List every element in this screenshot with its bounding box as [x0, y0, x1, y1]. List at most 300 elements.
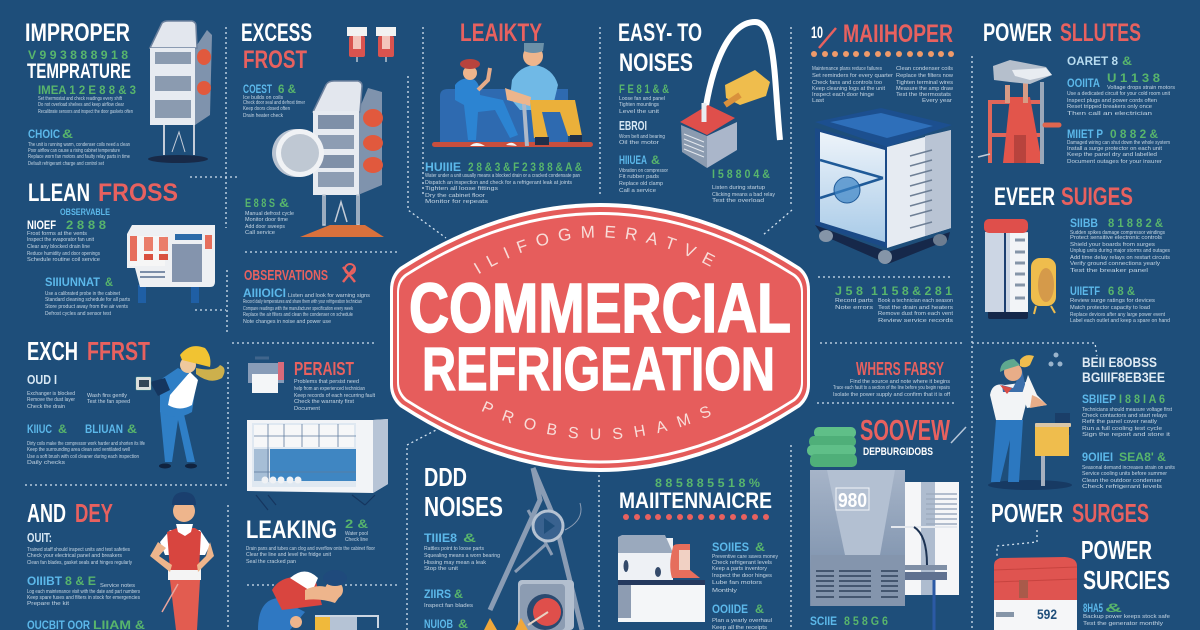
heading: SLLUTES — [1060, 19, 1141, 47]
dot row — [623, 514, 769, 520]
text block — [835, 298, 954, 324]
subheadings: & — [58, 422, 67, 436]
text block: Squealing means a worn bearing — [424, 553, 500, 559]
text block: Technicians should measure voltage first — [1082, 407, 1172, 413]
text block: Defrost cycles and sensor test — [45, 311, 111, 317]
text block right: Test the thermostats — [896, 92, 951, 98]
text block — [712, 185, 775, 204]
text block: Clear the line and level the fridge unit — [246, 552, 331, 558]
text block: Shield your boards from surges — [1070, 242, 1155, 248]
subheading: & — [454, 587, 463, 601]
subheading — [1067, 71, 1160, 90]
subheading row: 2 8 & 3 & F 2 3 8 8 & A & — [468, 160, 582, 174]
text block: Service cooling units before summer — [1082, 471, 1167, 477]
text block: Run a full cooling test cycle — [1082, 426, 1162, 432]
text block: Replace old clamp — [619, 181, 663, 187]
text block: Lube fan motors — [712, 580, 762, 586]
text block right: Replace the filters now — [896, 73, 953, 79]
subheadings — [27, 422, 137, 436]
subheading: COEST — [243, 82, 272, 96]
text block: Preventive care saves money — [712, 554, 778, 560]
badge kicker: ILIFOGMERATVE — [474, 226, 716, 274]
text block: Find the source and note where it begins — [850, 379, 950, 385]
heading with icon: OBSERVATIONS — [244, 267, 328, 284]
green label: J 5 8 — [835, 284, 863, 298]
panel: maintenance bottom — [618, 476, 778, 630]
text block: Frost forms at the vents — [27, 231, 87, 237]
text block: Use a soft brush with coil cleaner during each inspection — [27, 454, 139, 460]
heading — [27, 498, 113, 528]
panel: maintenance top — [811, 20, 954, 324]
subheading — [810, 614, 888, 628]
heading: EASY- TO — [618, 19, 702, 47]
text block — [38, 96, 133, 115]
title line 2: REFRIGEATION — [422, 335, 775, 403]
text block: Do not overload shelves and keep airflow clear — [38, 102, 124, 108]
text block — [425, 173, 580, 205]
text block: Inspect the evaporator fan unit — [27, 237, 94, 243]
subheading: OIIIBT — [27, 574, 63, 588]
text block: Clean the outdoor condenser — [1082, 478, 1162, 484]
panel: exch first — [27, 336, 225, 468]
subheading: I 8 8 I A 6 — [1119, 392, 1165, 406]
dot row — [811, 51, 954, 57]
text block right: Tighten terminal wires — [896, 80, 953, 86]
text block left: Maintenance plans reduce failures — [812, 66, 882, 72]
text block — [619, 134, 665, 146]
heading: POWER — [983, 19, 1052, 47]
panel: leaking — [246, 516, 378, 630]
heading: NOISES — [424, 491, 503, 522]
side note: Check line — [345, 537, 368, 543]
text block: Label each outlet and keep a spare on hand — [1070, 318, 1170, 324]
heading: SURGES — [1072, 498, 1149, 528]
icon: red generator: 592 — [1037, 606, 1057, 622]
subheading: SCIIE — [810, 614, 837, 628]
icon: frosted fridge — [272, 81, 384, 237]
text block: Test the generator monthly — [1083, 621, 1163, 627]
icon: red canisters — [347, 27, 396, 62]
text block: Check refrigerant levels — [712, 560, 772, 566]
text block: Level the unit — [619, 109, 660, 115]
subheading: TIIIE8 — [424, 531, 457, 545]
text block — [1082, 465, 1175, 490]
text block: Trained staff should inspect units and test safeties — [27, 547, 130, 553]
text block — [246, 546, 375, 565]
illustration: white machine — [618, 535, 705, 622]
text block: Dry the cabinet floor — [425, 193, 485, 199]
text block: Use a dedicated circuit for your cold room unit — [1067, 91, 1170, 97]
text block: Monitor for repeats — [425, 199, 488, 205]
subheading: & — [651, 153, 660, 167]
illustration: condenser machine: 980 — [838, 490, 867, 512]
text block: Listen and look for warning signs — [288, 293, 370, 299]
text block: Default refrigerant charge and control set — [28, 161, 104, 167]
text block: Check refrigerant levels — [1082, 484, 1162, 490]
text block — [424, 546, 500, 572]
text block: Oil the motor — [619, 140, 659, 146]
text block: Install a surge protector on each unit — [1067, 146, 1162, 152]
illustration: condenser machine — [810, 470, 959, 630]
text block: Log each maintenance visit with the date and part numbers — [27, 589, 140, 595]
subheading — [1070, 216, 1163, 230]
text block: Compare readings with the manufacturer specification every week — [243, 306, 353, 312]
text block — [1067, 85, 1175, 117]
text block: Listen during startup — [712, 185, 765, 191]
heading: 10 — [811, 23, 823, 42]
text block: Dispatch an inspection and check for a refrigerant leak at joints — [425, 180, 572, 186]
text block — [27, 589, 140, 607]
subheading: HIIUEA — [619, 153, 647, 167]
text block: Match protector capacity to load — [1070, 305, 1150, 311]
subheading — [27, 218, 106, 232]
heading: SURCIES — [1083, 565, 1170, 595]
text block: Set thermostat and check readings every shift — [38, 96, 122, 102]
text block: Inspect the door hinges — [712, 573, 772, 579]
subheading: & — [1105, 601, 1123, 615]
heading: FFRST — [87, 336, 150, 366]
text block: Keep a parts inventory — [712, 566, 767, 572]
heading: LEAKING — [246, 516, 337, 544]
heading — [28, 179, 178, 207]
subheading: SIIIUNNAT — [45, 275, 101, 289]
heading: DEY — [75, 498, 113, 528]
text block: Loose fan and panel — [619, 96, 665, 102]
text block: Monitor door time — [245, 217, 288, 223]
text block: Monthly — [712, 588, 737, 594]
text block: Water under a unit usually means a blocked drain or a cracked condensate pan — [425, 173, 580, 179]
subheading: 6 8 & — [1108, 284, 1135, 298]
panel: persist — [247, 358, 388, 510]
text block right: Measure the amp draw — [896, 86, 953, 92]
text block: Call a service — [619, 188, 656, 194]
subheading: UIIETF — [1070, 284, 1100, 298]
text block right: Clean condenser coils — [896, 66, 953, 72]
text block: Test the breaker panel — [1070, 268, 1148, 274]
subheadings: BLIUAN — [85, 422, 123, 436]
subheading: NIOEF — [27, 218, 56, 232]
subheading: OUIT: — [27, 530, 52, 545]
white heading lines: BEII E8OBSS — [1082, 354, 1157, 370]
subheading: SIIBB — [1070, 216, 1098, 230]
text block: Check your electrical panel and breakers — [27, 553, 122, 559]
text block — [243, 293, 370, 325]
illustration: hose and compressor box — [680, 22, 780, 168]
text block: Keep spare fuses and filters in stock for emergencies — [27, 595, 140, 601]
text block — [245, 211, 294, 236]
text block: Document — [294, 406, 320, 412]
subheading: ZIIRS — [424, 587, 451, 601]
text block — [27, 231, 100, 263]
icon: technician in red vest — [150, 492, 214, 630]
text block: Record parts — [835, 298, 873, 304]
panel: power surges — [991, 498, 1170, 630]
side note — [345, 531, 368, 543]
text block: The unit is running warm, condenser coils need a clean — [28, 142, 130, 148]
text block: Manual defrost cycle — [245, 211, 294, 217]
icon: display fridge — [148, 21, 212, 163]
green label: 2 & — [345, 517, 368, 531]
heading — [994, 183, 1133, 211]
text block: Use a calibrated probe in the cabinet — [45, 291, 120, 297]
text block: Test the drain and heaters — [878, 305, 953, 311]
text block: Remove dust from each vent — [878, 311, 954, 317]
text block: Sign the report and store it — [1082, 432, 1171, 438]
text block: Vibration on compressor — [619, 168, 668, 174]
subheading: choice: & — [62, 127, 73, 141]
subheading: choice: CHOIC — [28, 127, 60, 141]
central badge — [390, 203, 810, 472]
heading: WHERS FABSY — [856, 359, 944, 379]
text block left: Check fans and controls too — [812, 80, 882, 86]
text block — [27, 547, 132, 566]
text block left: Inspect each door hinge — [812, 92, 874, 98]
text block: Dirty coils make the compressor work harder and shorten its life — [27, 441, 145, 447]
blue label: OBSERVABLE — [60, 207, 110, 217]
text block — [1070, 298, 1170, 324]
subheading: OARET 8 — [1067, 54, 1118, 68]
text block — [45, 291, 130, 317]
text block right: Every year — [922, 98, 952, 104]
heading — [811, 20, 953, 48]
text block: Keep the surrounding area clean and ventilated well — [27, 447, 130, 453]
subheading: SBIIEP — [1082, 392, 1116, 406]
subheading: MIIET P — [1067, 127, 1103, 141]
text block: Add door sweeps — [245, 224, 285, 230]
text block: Seal the cracked pan — [246, 559, 296, 565]
text block: Protect sensitive electronic controls — [1070, 235, 1162, 241]
text block: Poor airflow can cause a rising cabinet temperature — [28, 148, 120, 154]
icon: red generator — [994, 557, 1077, 630]
text block left: Last — [812, 98, 825, 104]
subheadings: & — [127, 422, 137, 436]
icon: display case — [247, 419, 388, 510]
icon: small cabinet — [248, 358, 284, 393]
icon: green stack — [807, 427, 857, 467]
subheading: & — [1122, 54, 1132, 68]
heading — [27, 336, 150, 366]
green label: & — [279, 196, 289, 210]
text block: Wash fins gently — [87, 393, 127, 399]
green label: F E 8 1 & & — [619, 82, 669, 96]
panel: soovew unit — [807, 415, 966, 630]
text block: Check door seal and defrost timer — [243, 100, 305, 106]
text block: Document outages for your insurer — [1067, 159, 1162, 165]
text block: Plan a yearly overhaul — [712, 618, 772, 624]
subheadings: KIIUC — [27, 422, 52, 436]
text block: Unplug units during major storms and outages — [1070, 248, 1170, 254]
subheading: AIIIOICI — [243, 286, 286, 300]
text block: Check the warranty first — [294, 399, 354, 405]
arrow accent — [951, 427, 966, 443]
panel: where's fabsy — [833, 359, 950, 398]
subheading: OOIITA — [1067, 76, 1100, 90]
illustration: gauge hoses and compressor — [484, 468, 582, 630]
heading: PERAIST — [294, 359, 354, 379]
subheading: 0 8 8 2 & — [1110, 127, 1158, 141]
subheading — [27, 618, 145, 630]
panel: odd noises — [424, 462, 582, 630]
text block — [833, 379, 950, 398]
text block: Clicking means a bad relay — [712, 192, 775, 198]
text block left: Keep cleaning logs at the unit — [812, 86, 885, 92]
text block: Keep records of each recurring fault — [294, 393, 375, 399]
heading: FROSS — [98, 179, 178, 207]
text block: Stop the unit — [424, 566, 459, 572]
subheading: & — [105, 275, 113, 289]
text block: Store product away from the air vents — [45, 304, 128, 310]
text block: Tighten all loose fittings — [425, 186, 498, 192]
icon: woman in hard hat — [136, 346, 225, 468]
text block left — [812, 66, 893, 104]
text block: Trace each fault to a section of the line before you begin repairs — [833, 385, 950, 391]
icon: worker bending — [258, 570, 378, 630]
text block: Clear any blocked drain line — [27, 244, 90, 250]
icon: blue-top unit — [815, 108, 952, 264]
text block: Prepare the kit — [27, 601, 70, 607]
heading: NOISES — [619, 49, 693, 77]
text block — [1067, 140, 1170, 165]
green label — [835, 284, 952, 298]
heading: POWER — [1081, 535, 1152, 565]
heading: POWER — [991, 498, 1063, 528]
text block: help from an experienced technician — [294, 386, 365, 392]
subheading: 8 1 8 8 2 & — [1108, 216, 1163, 230]
text block — [619, 96, 665, 115]
green label: I 5 8 8 0 4 & — [712, 167, 770, 181]
text block: Replace worn fan motors and faulty relay parts in time — [28, 154, 130, 160]
text block — [243, 95, 305, 119]
text block: Remove the dust layer — [27, 397, 75, 403]
text block: Keep the panel dry and labelled — [1067, 152, 1157, 158]
green subheading: V 9 9 3 8 8 8 9 1 8 — [28, 48, 128, 62]
panel: ever surges — [984, 183, 1170, 324]
heading: EVEER — [994, 183, 1055, 211]
green label: E 8 8 S — [245, 196, 275, 210]
illustration: two people on a bench — [432, 43, 593, 147]
text block right — [896, 66, 953, 104]
illustration: technician at desk — [988, 352, 1072, 490]
subheading: OOIIDE — [712, 602, 748, 616]
text block — [712, 554, 778, 594]
text block: Damaged wiring can shut down the whole system — [1067, 140, 1170, 146]
subheading: & — [463, 531, 476, 545]
text block — [27, 441, 145, 466]
heading: MAIITENNAICRE — [619, 488, 772, 513]
text block: Refit the panel cover neatly — [1082, 419, 1157, 425]
subheading: 2 8 8 8 — [66, 218, 106, 232]
subheading: 8 & E — [65, 574, 96, 588]
text block: Inspect fan blades — [424, 603, 473, 609]
text block — [1070, 230, 1170, 274]
text block: Daily checks — [27, 460, 65, 466]
subheading: SEA8' & — [1119, 450, 1166, 464]
subheading row — [425, 160, 582, 174]
text block: Clean fan blades, gasket seals and hinges regularly — [27, 560, 132, 566]
heading: temperature: TEMPRATURE — [27, 60, 131, 83]
heading: MAIIHOPER — [843, 20, 953, 48]
text block: Then call an electrician — [1067, 111, 1152, 117]
white heading lines: BGIIIF8EB3EE — [1082, 369, 1165, 385]
heading: LLEAN — [28, 179, 90, 207]
text block — [712, 618, 772, 630]
heading: excess: EXCESS — [241, 19, 312, 47]
text block: Replace devices after any large power event — [1070, 312, 1165, 318]
text block: Record daily temperatures and share them with your refrigeration technician — [243, 299, 362, 305]
green label: 1 1 5 8 & 2 8 1 — [871, 284, 952, 298]
heading — [991, 498, 1149, 528]
text block: Book a technician each season — [878, 298, 953, 304]
text block: Drain heater check — [243, 113, 283, 119]
text block: Inspect plugs and power cords often — [1067, 98, 1157, 104]
subheading: SOIIES — [712, 540, 749, 554]
text block: Check the drain — [27, 404, 65, 410]
subheading — [424, 531, 476, 545]
subheading: Service notes — [100, 583, 135, 589]
panel: improper temperature — [25, 19, 212, 167]
text block: Note changes in noise and power use — [243, 319, 331, 325]
text block — [294, 379, 375, 412]
text block: Seasonal demand increases strain on units — [1082, 465, 1175, 471]
text block: Hissing may mean a leak — [424, 560, 486, 566]
panel: lean frost — [27, 179, 215, 317]
text block: Standard cleaning schedule for all parts — [45, 297, 130, 303]
heading — [983, 19, 1141, 47]
subheading — [1070, 284, 1135, 298]
text block: Isolate the power supply and confirm that it is off — [833, 392, 950, 398]
text block — [1083, 614, 1170, 627]
heading: SOOVEW — [860, 415, 950, 447]
heading: improper: IMPROPER — [25, 19, 130, 47]
text block: Recalibrate sensors and inspect the door gaskets often — [38, 109, 133, 115]
subheading: & — [755, 540, 765, 554]
icon: column unit with heater — [984, 219, 1056, 319]
heading: DDD — [424, 462, 467, 492]
subheading — [1082, 450, 1166, 464]
text block: Worn belt and bearing — [619, 134, 665, 140]
text block: Test the fan speed — [87, 399, 130, 405]
green label: IMEA 1 2 E 8 8 & 3 — [38, 83, 136, 97]
heading: EXCH — [27, 336, 78, 366]
text block: Schedule routine coil service — [27, 257, 100, 263]
subheading: 9OIIEI — [1082, 450, 1113, 464]
panel: excess frost — [241, 19, 396, 237]
text block: Problems that persist need — [294, 379, 359, 385]
text block: Voltage drops strain motors — [1107, 85, 1175, 91]
subheading: 8 5 8 G 6 — [844, 614, 888, 628]
text block: Keep doors closed often — [243, 106, 290, 112]
text block: Check contactors and start relays — [1082, 413, 1167, 419]
text block: Verify ground connections yearly — [1070, 261, 1160, 267]
panel: observations — [243, 264, 370, 325]
panel: power slutes — [978, 19, 1175, 165]
text block: Add time delay relays on restart circuits — [1070, 255, 1170, 261]
icon: serving counter — [127, 225, 215, 303]
title line 1: COMMERCIAL — [409, 269, 791, 347]
text block left: Set reminders for every quarter — [812, 73, 893, 79]
text block: Drain pans and tubes can clog and overflow onto the cabinet floor — [246, 546, 375, 552]
text block: Rattles point to loose parts — [424, 546, 484, 552]
text block: Reduce humidity and door openings — [27, 251, 100, 257]
heading: SUIGES — [1061, 183, 1133, 211]
panel: easy-to noises — [618, 19, 780, 204]
subheading: 8HA5 — [1083, 601, 1103, 615]
subheading: EBROI — [619, 118, 647, 133]
heading: LEAIKTY — [460, 19, 542, 47]
subheading row: HUIIIE — [425, 160, 461, 174]
icon: red machine frame — [978, 60, 1059, 164]
panel: leaky — [425, 19, 593, 205]
